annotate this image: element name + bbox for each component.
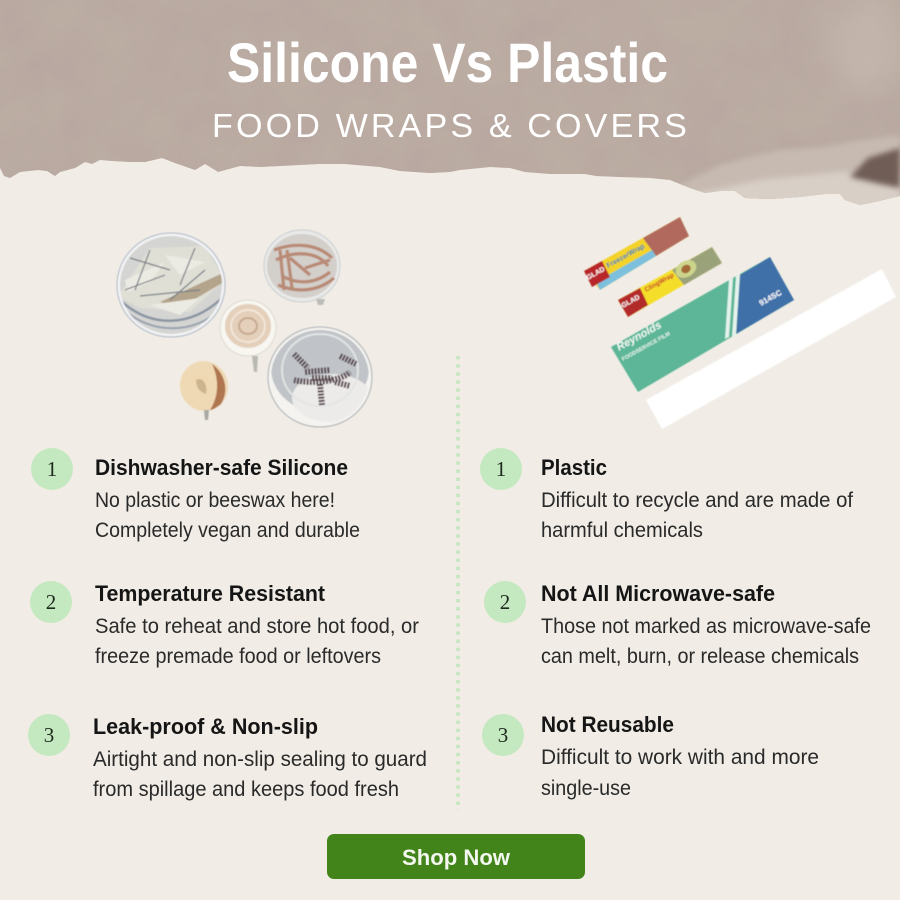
item heading: Temperature Resistant [95,581,326,606]
number badge [30,581,72,623]
number badge: 3 [44,723,54,747]
item body [541,615,871,668]
item heading: Not All Microwave-safe [541,581,775,606]
box: Glad Freezer Wrap: FreezerWrap [606,243,646,270]
plate with sausages [264,230,340,305]
white strip [646,269,896,429]
dotted divider [456,356,460,810]
item body: Difficult to work with and more [541,746,819,769]
image: plastic wrap boxes [584,217,896,429]
item body: Safe to reheat and store hot food, or [95,615,419,638]
item body: harmful chemicals [541,519,703,542]
box: Reynolds food service film: FOODSERVICE FILM [621,331,672,363]
item heading: Leak-proof & Non-slip [93,714,318,739]
image: silicone covers on plates and apple [117,230,372,427]
box: Reynolds food service film: 914SC [758,288,784,308]
item body: Difficult to recycle and are made of [541,489,853,512]
right item 1 [480,448,853,542]
item body: No plastic or beeswax here! [95,489,335,512]
item heading: Dishwasher-safe Silicone [95,455,348,480]
small cup [220,300,276,372]
number badge [482,714,524,756]
item body [95,489,360,542]
item body: can melt, burn, or release chemicals [541,645,859,668]
box: Glad Cling Wrap: GLAD [621,294,641,310]
header: torn watercolor banner [0,0,900,210]
item body: Those not marked as microwave-safe [541,615,871,638]
number badge [31,448,73,490]
item body: Completely vegan and durable [95,519,360,542]
number badge [28,714,70,756]
number badge: 2 [500,590,510,614]
subtitle: FOOD WRAPS & COVERS [212,107,690,144]
item body: Airtight and non-slip sealing to guard [93,748,427,771]
box: Reynolds food service film [611,257,794,392]
box: Reynolds food service film: Reynolds [615,319,664,354]
box: Glad Cling Wrap: ClingWrap [644,272,675,294]
number badge: 1 [496,457,506,481]
item body [93,748,427,801]
item body [95,615,419,668]
button: Shop Now: Shop Now [402,845,511,870]
box: Glad Freezer Wrap: GLAD [586,266,606,282]
left item 3 [28,714,427,801]
cut apple half [174,356,234,420]
number badge [480,448,522,490]
item body [541,746,819,800]
box: Glad Freezer Wrap [584,217,689,290]
right item 3 [482,712,819,800]
item body: from spillage and keeps food fresh [93,778,399,801]
number badge: 3 [498,723,508,747]
item body: freeze premade food or leftovers [95,645,381,668]
plate with leaves [117,233,225,337]
item heading: Plastic [541,455,607,480]
number badge [484,581,526,623]
item body [541,489,853,542]
item body: single-use [541,777,631,800]
item heading: Not Reusable [541,712,674,737]
left item 2 [30,581,419,668]
left item 1 [31,448,360,542]
title: Silicone Vs Plastic [227,31,668,94]
box: Glad Cling Wrap [618,247,722,317]
number badge: 2 [46,590,56,614]
number badge: 1 [47,457,57,481]
button: Shop Now [327,834,585,879]
plate with dark food [268,324,372,427]
right item 2 [484,581,871,668]
